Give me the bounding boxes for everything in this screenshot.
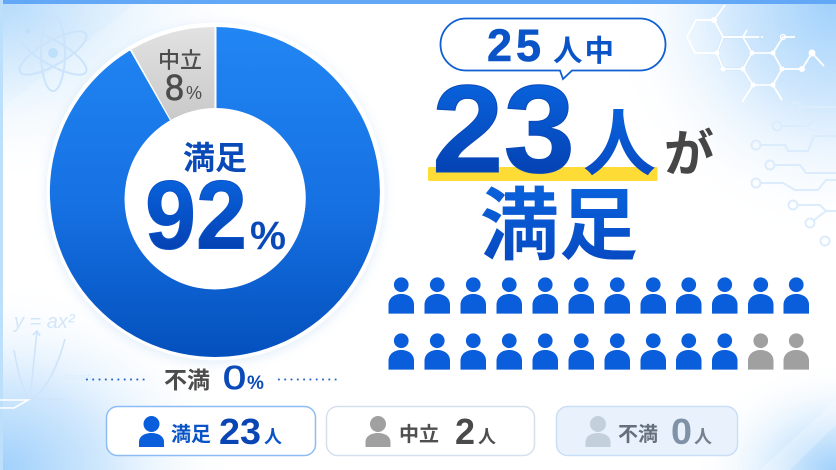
label: satisfied 92%: % — [250, 214, 286, 258]
slice: neutral 8% — [132, 27, 214, 120]
headline: 23人が満足: 満足 — [480, 161, 638, 276]
formula sketch — [0, 311, 92, 408]
legend card: dissatisfied — [556, 406, 738, 456]
callout: 25人中: 25 — [487, 20, 541, 71]
headline: 23人が満足: 人 — [583, 85, 656, 191]
slice: satisfied 92% — [50, 27, 380, 357]
label: dissatisfied 0%: 不満 — [164, 361, 210, 395]
donut chart — [46, 22, 384, 362]
callout: 25人中 — [441, 18, 666, 79]
formula sketch: y = ax² — [12, 311, 76, 333]
callout: 25人中: 人中 — [553, 28, 616, 70]
formula sketch: f=cosh — [65, 372, 92, 382]
label: neutral: % — [186, 83, 202, 103]
pictogram: 25 people — [388, 277, 809, 370]
legend card: neutral: 人 — [478, 423, 496, 449]
legend card: satisfied: 満足 — [171, 418, 211, 447]
label: satisfied 92%: 満足 — [183, 133, 247, 179]
label: dissatisfied 0%: 0 — [223, 359, 246, 396]
legend card: satisfied: 人 — [264, 423, 282, 449]
legend card: satisfied: 23 — [219, 411, 261, 452]
label: dissatisfied 0%: % — [247, 373, 264, 394]
label: satisfied 92% — [145, 133, 286, 270]
label: neutral: 8 — [165, 67, 184, 108]
icon: molecule hexagons — [687, 5, 824, 102]
headline: 23人が満足: が — [664, 114, 714, 186]
legend card: neutral: 2 — [455, 411, 475, 452]
legend card: neutral: 中立 — [399, 418, 439, 447]
icon: circuit lines — [752, 102, 836, 246]
legend card: dissatisfied: 0 — [671, 411, 692, 452]
label: neutral — [158, 43, 202, 108]
legend card: dissatisfied: 人 — [694, 423, 712, 449]
icon: atom — [14, 15, 92, 91]
highlight bar — [428, 167, 658, 181]
center circle — [124, 108, 306, 290]
headline: 23人が満足 — [428, 60, 714, 276]
label: satisfied 92%: 92 — [145, 160, 247, 270]
label: neutral: 中立 — [158, 43, 202, 75]
legend card: satisfied — [106, 406, 316, 456]
legend card: dissatisfied: 不満 — [618, 418, 658, 447]
headline: 23人が満足: 23 — [432, 60, 575, 199]
legend card: neutral — [326, 406, 534, 456]
label: dissatisfied 0% — [86, 359, 337, 396]
